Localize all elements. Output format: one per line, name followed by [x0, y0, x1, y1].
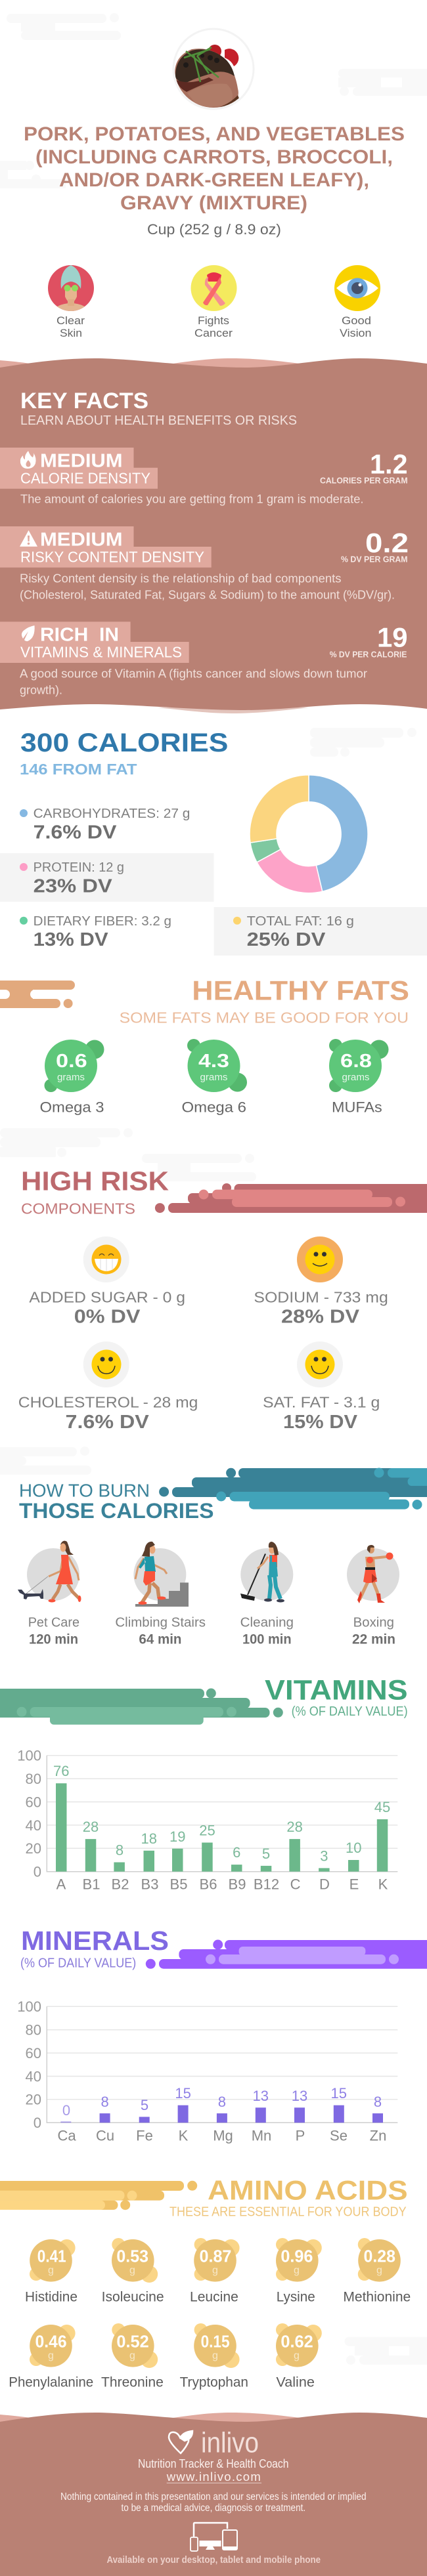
subheading: components: COMPONENTS	[21, 1200, 135, 1217]
y axis labels: 100	[17, 1998, 41, 2015]
subheading: minerals: (% OF DAILY VALUE)	[20, 1955, 136, 1970]
activity: boxing	[347, 1545, 399, 1647]
amino: lysine	[276, 2238, 322, 2305]
amino: isoleucine	[102, 2238, 164, 2305]
amino: phenylalanine: Phenylalanine	[9, 2375, 93, 2390]
bar values: 15	[175, 2085, 191, 2101]
amino: leucine: g	[212, 2265, 218, 2276]
title: GRAVY (MIXTURE)	[120, 192, 307, 214]
activity: pet care	[18, 1541, 81, 1647]
y axis labels: 40	[26, 2069, 41, 2084]
fat: omega 3: 0.6	[56, 1051, 87, 1072]
heading: how to burn: HOW TO BURN	[19, 1481, 150, 1501]
category labels: B9	[229, 1876, 246, 1892]
risk: added sugar: 0% DV	[74, 1307, 141, 1328]
y axis labels: 80	[26, 1771, 41, 1787]
heading: minerals: MINERALS	[21, 1926, 169, 1956]
bar values: 5	[141, 2097, 148, 2113]
nutrient: total fat	[214, 907, 427, 956]
amino: tryptophan: 0.15	[201, 2332, 230, 2352]
description: A good source of Vitamin A (fights cancer and slows down tumor	[20, 667, 367, 680]
nutrient: dietary fiber	[20, 914, 171, 950]
icon: leaf	[22, 625, 35, 641]
fact: rich in vitamins and minerals	[0, 622, 408, 696]
food photo circle	[173, 29, 254, 112]
y axis labels: 20	[26, 2091, 41, 2108]
heading: amino acids: AMINO ACIDS	[208, 2175, 408, 2206]
description: Risky Content density is the relationship of bad components	[20, 572, 342, 585]
fat: mufas: 6.8	[340, 1051, 372, 1072]
bar values: 45	[374, 1799, 390, 1815]
bars	[60, 2105, 383, 2122]
category labels: Cu	[96, 2128, 114, 2144]
fat: mufas: grams	[342, 1072, 369, 1083]
risk: cholesterol: CHOLESTEROL - 28 mg	[18, 1394, 198, 1411]
y axis labels: 60	[26, 2045, 41, 2061]
value: 19	[377, 622, 408, 653]
rating: MEDIUM	[40, 530, 123, 551]
fat: omega 3	[39, 1040, 104, 1115]
background cloud top left	[7, 13, 121, 40]
decoration: minerals	[146, 1940, 427, 1969]
activity: boxing: 22 min	[352, 1632, 395, 1647]
y axis labels: 100	[17, 1748, 41, 1764]
category labels: A	[56, 1876, 66, 1892]
background cloud burn	[0, 1446, 91, 1475]
bar values: 13	[253, 2088, 269, 2104]
title	[24, 123, 405, 214]
description	[20, 667, 367, 696]
benefit label: clear skin	[56, 314, 85, 339]
activity: pet care: 120 min	[29, 1632, 78, 1647]
amino: histidine: 0.41	[37, 2247, 66, 2266]
fat: omega 6: Omega 6	[181, 1099, 246, 1115]
bar values: 25	[199, 1822, 215, 1839]
bar values: 15	[331, 2085, 347, 2101]
unit: CALORIES PER GRAM	[320, 476, 408, 486]
amino: valine: Valine	[276, 2375, 315, 2390]
amino: histidine: Histidine	[25, 2290, 78, 2305]
logo: wordmark: inlivo	[201, 2427, 259, 2459]
nutrient: protein: PROTEIN: 12 g	[34, 860, 124, 875]
availability note: Available on your desktop, tablet and mobile phone	[106, 2554, 321, 2565]
y axis labels	[17, 1998, 41, 2131]
bar values: 18	[141, 1830, 157, 1847]
title: (INCLUDING CARROTS, BROCCOLI,	[35, 146, 393, 168]
bar chart: minerals	[17, 1998, 397, 2144]
amino: valine	[276, 2323, 322, 2390]
activity: climbing stairs	[115, 1542, 206, 1647]
heading: key facts: KEY FACTS	[20, 389, 148, 413]
category labels: B1	[83, 1876, 100, 1892]
risk: sodium	[254, 1236, 388, 1328]
illustration: dog walker	[18, 1541, 81, 1603]
amino: threonine: 0.52	[116, 2332, 149, 2352]
bar values: 3	[320, 1848, 328, 1864]
y axis labels	[17, 1748, 41, 1880]
category labels: Mn	[252, 2128, 271, 2144]
risk: saturated fat: SAT. FAT - 3.1 g	[263, 1394, 380, 1411]
value: 1.2	[370, 449, 408, 480]
amino: methionine: 0.28	[364, 2247, 395, 2266]
amino: phenylalanine: 0.46	[35, 2332, 67, 2352]
benefit label: clear skin: Clear	[56, 314, 85, 327]
amino: threonine: g	[129, 2350, 135, 2361]
amino: isoleucine: Isoleucine	[102, 2290, 164, 2305]
panel: key facts	[0, 358, 427, 713]
risk: added sugar: ADDED SUGAR - 0 g	[29, 1288, 185, 1305]
decoration: amino acids	[0, 2181, 197, 2210]
nutrient: carbohydrates	[20, 807, 190, 843]
description: (Cholesterol, Saturated Fat, Sugars & Sodium) to the amount (%DV/gr).	[20, 588, 395, 601]
benefit label: fights cancer: Fights	[198, 314, 229, 327]
risk: cholesterol	[18, 1341, 198, 1433]
bar values: 13	[292, 2088, 307, 2104]
benefit label: fights cancer: Cancer	[194, 327, 233, 339]
title: AND/OR DARK-GREEN LEAFY),	[59, 169, 369, 191]
risk: sodium: SODIUM - 733 mg	[254, 1288, 388, 1305]
fat: mufas: MUFAs	[332, 1099, 382, 1115]
amino: tryptophan: Tryptophan	[180, 2375, 248, 2390]
bars	[56, 1783, 388, 1872]
category labels: K	[378, 1876, 388, 1892]
category labels: Ca	[57, 2128, 76, 2144]
nutrient: total fat: 25% DV	[247, 929, 326, 950]
heading: vitamins: VITAMINS	[265, 1674, 408, 1706]
benefit: good vision	[334, 265, 380, 311]
nutrient: dietary fiber: DIETARY FIBER: 3.2 g	[34, 914, 171, 929]
activity: cleaning	[240, 1542, 294, 1647]
icon: flame	[20, 451, 36, 469]
fat: omega 3: Omega 3	[39, 1099, 104, 1115]
y axis labels: 0	[34, 2115, 41, 2131]
category labels: Se	[330, 2128, 348, 2144]
y axis labels: 60	[26, 1794, 41, 1810]
category labels: P	[296, 2128, 305, 2144]
benefit label: fights cancer	[194, 314, 233, 339]
benefit label: good vision: Good	[342, 314, 371, 327]
activity: climbing stairs: Climbing Stairs	[115, 1616, 206, 1630]
amino: leucine	[190, 2238, 240, 2305]
fact: calorie density	[0, 448, 408, 506]
amino: tryptophan	[180, 2323, 248, 2390]
title: PORK, POTATOES, AND VEGETABLES	[24, 123, 405, 145]
benefit label: good vision	[340, 314, 372, 339]
decoration: high risk	[155, 1183, 427, 1213]
amino: leucine: Leucine	[190, 2290, 238, 2305]
fat: omega 3: grams	[57, 1072, 85, 1083]
decoration: vitamins	[0, 1688, 283, 1725]
illustration: boxer	[357, 1545, 393, 1603]
nutrient: protein	[0, 853, 214, 902]
background cloud left of title	[0, 161, 66, 188]
bar chart: vitamins	[17, 1748, 397, 1892]
nutrient: total fat: TOTAL FAT: 16 g	[247, 914, 354, 929]
label: RISKY CONTENT DENSITY	[20, 549, 204, 566]
benefit label: clear skin: Skin	[60, 327, 82, 339]
bar values: 0	[62, 2102, 70, 2119]
category labels: B12	[254, 1876, 279, 1892]
subheading: vitamins: (% OF DAILY VALUE)	[292, 1704, 408, 1719]
bar values: 8	[116, 1842, 124, 1859]
amino: methionine: g	[376, 2265, 382, 2276]
bar values: 8	[374, 2094, 382, 2110]
fat: omega 6: 4.3	[198, 1051, 229, 1072]
nutrient: dietary fiber: 13% DV	[34, 929, 108, 950]
label: VITAMINS & MINERALS	[20, 644, 182, 661]
amino: leucine: 0.87	[200, 2247, 231, 2266]
nutrient: carbohydrates: CARBOHYDRATES: 27 g	[34, 807, 190, 821]
nutrient: protein: 23% DV	[34, 876, 113, 897]
bar values: 28	[83, 1819, 99, 1835]
amino: methionine	[343, 2238, 411, 2305]
bar values: 6	[233, 1844, 240, 1861]
illustration: stairs climber	[135, 1542, 189, 1607]
unit: % DV PER GRAM	[341, 555, 408, 564]
category labels	[56, 1876, 388, 1892]
description	[20, 572, 395, 601]
amino: lysine: g	[294, 2265, 300, 2276]
y axis labels: 80	[26, 2021, 41, 2038]
bar values: 10	[346, 1840, 361, 1856]
category labels: B2	[112, 1876, 129, 1892]
category labels: C	[290, 1876, 301, 1892]
icon: warning	[20, 530, 37, 547]
website link: www.inlivo.com	[166, 2470, 261, 2483]
activity: pet care: Pet Care	[28, 1616, 79, 1630]
activity: cleaning: Cleaning	[240, 1616, 294, 1630]
bar values	[62, 2085, 382, 2119]
nutrient: carbohydrates: 7.6% DV	[34, 822, 117, 843]
subheading: calories from fat: 146 FROM FAT	[20, 761, 137, 778]
illustration: person sweeping	[240, 1542, 284, 1603]
bar values: 8	[218, 2094, 226, 2110]
unit: % DV PER CALORIE	[330, 650, 407, 660]
benefit label: good vision: Vision	[340, 327, 372, 339]
category labels: Mg	[213, 2128, 233, 2144]
tagline: Nutrition Tracker & Health Coach	[138, 2457, 289, 2470]
decoration: healthy fats	[0, 981, 75, 1008]
amino: threonine: Threonine	[101, 2375, 164, 2390]
category labels: B3	[141, 1876, 158, 1892]
icon: devices	[191, 2523, 237, 2551]
fat: mufas	[329, 1039, 389, 1115]
category labels: B5	[170, 1876, 187, 1892]
benefit: clear skin	[48, 265, 94, 311]
fact: risky content density	[0, 526, 409, 601]
fat: omega 6: grams	[200, 1072, 227, 1083]
background cloud top right	[338, 69, 427, 96]
activity: boxing: Boxing	[353, 1616, 394, 1630]
category labels: K	[179, 2128, 189, 2144]
activity: cleaning: 100 min	[242, 1632, 292, 1647]
risk: cholesterol: 7.6% DV	[66, 1412, 150, 1433]
description: The amount of calories you are getting from 1 gram is moderate.	[20, 493, 364, 506]
subheading: healthy fats: SOME FATS MAY BE GOOD FOR YOU	[120, 1009, 409, 1026]
bar values: 8	[101, 2094, 109, 2110]
risk: saturated fat	[263, 1341, 380, 1433]
activity: climbing stairs: 64 min	[139, 1632, 181, 1647]
bar values: 76	[53, 1763, 70, 1779]
background cloud amino acids	[344, 2337, 427, 2365]
amino: tryptophan: g	[212, 2350, 218, 2361]
donut chart	[250, 775, 368, 893]
subheading: key facts: LEARN ABOUT HEALTH BENEFITS OR RISKS	[20, 413, 297, 428]
amino: lysine: 0.96	[281, 2247, 313, 2266]
amino: phenylalanine	[9, 2325, 93, 2390]
y axis labels: 0	[34, 1864, 41, 1880]
heading: those calories: THOSE CALORIES	[19, 1499, 214, 1523]
y axis labels: 20	[26, 1840, 41, 1857]
amino: lysine: Lysine	[277, 2290, 315, 2305]
risk: sodium: 28% DV	[281, 1307, 360, 1328]
value: 0.2	[365, 528, 409, 559]
amino: valine: 0.62	[281, 2332, 313, 2352]
category labels	[57, 2128, 386, 2144]
background cloud calories	[310, 728, 416, 757]
heading: healthy fats: HEALTHY FATS	[192, 975, 409, 1005]
amino: isoleucine: 0.53	[116, 2247, 148, 2266]
bar values: 5	[262, 1846, 270, 1862]
risk: added sugar	[29, 1236, 185, 1328]
category labels: D	[319, 1876, 330, 1892]
amino: histidine: g	[48, 2265, 54, 2276]
label: CALORIE DENSITY	[20, 470, 150, 487]
heading: calories: 300 CALORIES	[20, 728, 228, 757]
rating: MEDIUM	[40, 451, 123, 472]
logo: heart and leaf	[169, 2431, 192, 2453]
category labels: B6	[200, 1876, 217, 1892]
serving size: Cup (252 g / 8.9 oz)	[147, 221, 281, 238]
bar values: 28	[286, 1819, 303, 1835]
amino: isoleucine: g	[129, 2265, 135, 2276]
decoration: burn	[159, 1467, 427, 1510]
category labels: Zn	[370, 2128, 386, 2144]
bar values	[53, 1763, 390, 1864]
heading: high risk: HIGH RISK	[21, 1166, 169, 1196]
risk: saturated fat: 15% DV	[283, 1412, 358, 1433]
amino: histidine	[25, 2239, 78, 2305]
bar values: 19	[169, 1828, 186, 1845]
amino: threonine	[101, 2323, 164, 2390]
background clouds high risk	[0, 1128, 256, 1181]
panel: footer	[0, 2413, 427, 2576]
amino: valine: g	[294, 2350, 300, 2361]
y axis labels: 40	[26, 1817, 41, 1834]
benefit: fights cancer	[191, 265, 236, 311]
disclaimer: to be a medical advice, diagnosis or treatment.	[121, 2502, 305, 2514]
rating: RICH IN	[40, 625, 119, 646]
amino: phenylalanine: g	[48, 2350, 54, 2361]
category labels: Fe	[136, 2128, 153, 2144]
disclaimer: Nothing contained in this presentation and our services is intended or implied	[60, 2491, 367, 2502]
disclaimer	[60, 2491, 367, 2514]
amino: methionine: Methionine	[343, 2290, 411, 2305]
category labels: E	[349, 1876, 359, 1892]
description: growth).	[20, 683, 62, 696]
fat: omega 6	[181, 1039, 247, 1115]
